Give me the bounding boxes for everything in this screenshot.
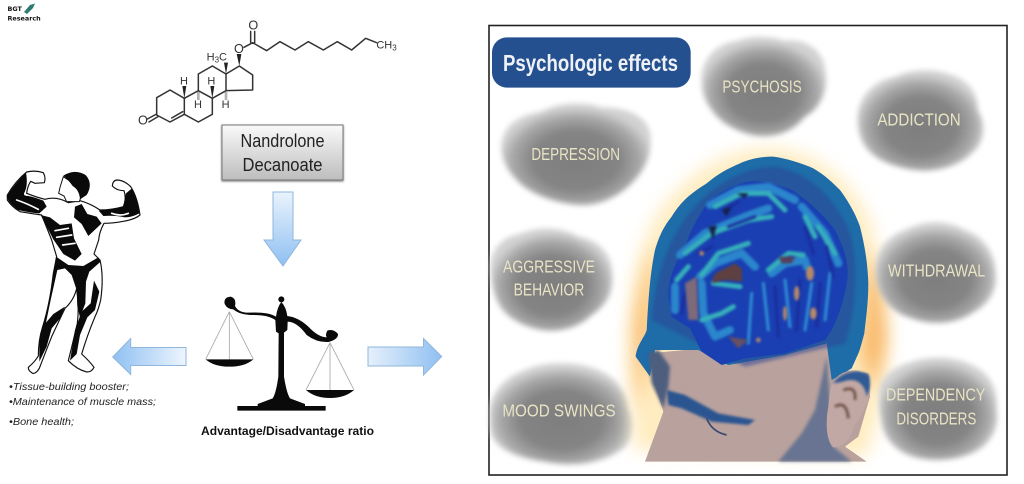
chemical structure: nandrolone decanoate: CH xyxy=(376,40,392,52)
cloud: mood swings xyxy=(490,363,633,464)
brain xyxy=(668,181,848,365)
chemical structure: nandrolone decanoate: H xyxy=(207,52,215,64)
cloud: aggressive behavior: BEHAVIOR xyxy=(514,280,584,300)
cloud: aggressive behavior: AGGRESSIVE xyxy=(503,257,595,277)
box: Nandrolone Decanoate xyxy=(222,125,343,180)
chemical structure: nandrolone decanoate: 3 xyxy=(392,44,397,53)
cloud: dependency disorders xyxy=(879,358,997,460)
ear xyxy=(827,370,870,447)
figure: bodybuilder xyxy=(7,171,140,373)
cloud: addiction xyxy=(858,70,983,171)
cloud: dependency disorders: DEPENDENCY xyxy=(886,385,986,405)
cloud: depression xyxy=(502,104,651,205)
box: Nandrolone Decanoate: Nandrolone xyxy=(240,130,324,151)
chemical structure: nandrolone decanoate xyxy=(138,19,397,127)
chemical structure: nandrolone decanoate: O xyxy=(248,19,258,33)
benefits list xyxy=(9,381,156,428)
chemical structure: nandrolone decanoate: H xyxy=(222,99,230,111)
cloud: withdrawal xyxy=(875,222,996,323)
hair and skull xyxy=(636,157,868,380)
cloud: addiction: ADDICTION xyxy=(877,109,961,129)
chemical structure: nandrolone decanoate: C xyxy=(219,52,227,64)
heading: Psychologic effects: Psychologic effects xyxy=(503,50,678,76)
arrow: down xyxy=(264,192,301,266)
chemical structure: nandrolone decanoate: O xyxy=(138,113,148,127)
chemical structure: nandrolone decanoate: H xyxy=(194,99,202,111)
caption: Advantage/Disadvantage ratio: Advantage/Disadvantage ratio xyxy=(201,426,374,438)
skin xyxy=(645,337,870,462)
benefits list: •Bone health; xyxy=(9,416,74,428)
cloud: withdrawal: WITHDRAWAL xyxy=(888,261,986,281)
chemical structure: nandrolone decanoate: O xyxy=(234,42,244,56)
cloud: aggressive behavior xyxy=(491,229,613,331)
logo: BGT Research: BGT xyxy=(8,5,23,13)
benefits list: •Tissue-building booster; xyxy=(9,381,129,393)
chemical structure: nandrolone decanoate: H xyxy=(207,75,215,87)
panel: psychologic effects xyxy=(489,26,1007,475)
arrow: right xyxy=(368,338,442,375)
box: Nandrolone Decanoate: Decanoate xyxy=(242,154,322,175)
cloud: depression: DEPRESSION xyxy=(531,144,620,164)
cloud: mood swings: MOOD SWINGS xyxy=(502,401,616,421)
head with glowing brain xyxy=(628,148,887,462)
brow, eye and shading xyxy=(667,390,755,425)
heading: Psychologic effects xyxy=(492,37,691,88)
cloud: psychosis: PSYCHOSIS xyxy=(722,76,802,96)
logo: BGT Research: Research xyxy=(8,14,41,22)
cloud: psychosis xyxy=(702,37,826,136)
chemical structure: nandrolone decanoate: H xyxy=(180,75,188,87)
cloud: dependency disorders: DISORDERS xyxy=(896,409,976,429)
logo: BGT Research xyxy=(8,4,41,22)
chemical structure: nandrolone decanoate: 3 xyxy=(215,56,220,65)
arrow: left xyxy=(113,338,186,374)
benefits list: •Maintenance of muscle mass; xyxy=(9,396,156,408)
head xyxy=(59,177,83,202)
icon: balance scale xyxy=(206,296,354,411)
